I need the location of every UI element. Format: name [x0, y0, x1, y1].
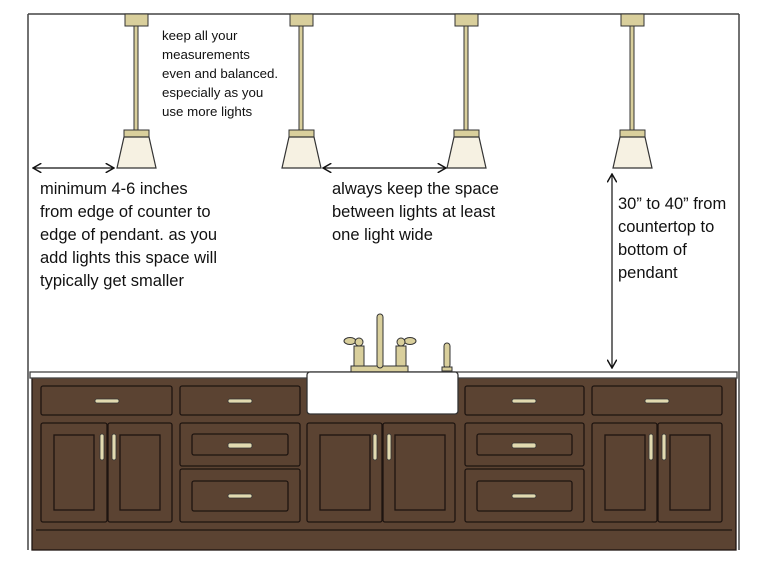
text: height: countertop to: [618, 218, 714, 236]
arrow: between lights: [323, 167, 446, 169]
text: spacing between lights: between lights at least: [332, 203, 495, 221]
text: spacing between lights: one light wide: [332, 226, 433, 244]
text: balanced measurements: measurements: [162, 47, 250, 62]
text: height: 30” to 40” from: [618, 195, 726, 213]
text: edge spacing: minimum 4-6 inches: [40, 180, 188, 198]
text: balanced measurements: use more lights: [162, 104, 252, 119]
text: edge spacing: [40, 180, 217, 290]
cabinets: [30, 372, 737, 550]
text: balanced measurements: even and balanced.: [162, 66, 278, 81]
text: height: pendant: [618, 264, 678, 282]
text: edge spacing: add lights this space will: [40, 249, 217, 267]
text: spacing between lights: always keep the space: [332, 180, 499, 198]
arrow: edge spacing: [33, 167, 114, 169]
pendant lights: [117, 14, 652, 168]
text: height: bottom of: [618, 241, 687, 259]
arrow: height: [611, 174, 613, 368]
text: edge spacing: edge of pendant. as you: [40, 226, 217, 244]
text: edge spacing: from edge of counter to: [40, 203, 211, 221]
text: balanced measurements: especially as you: [162, 85, 263, 100]
text: balanced measurements: [162, 28, 278, 119]
text: spacing between lights: [332, 180, 499, 244]
text: balanced measurements: keep all your: [162, 28, 237, 43]
text: edge spacing: typically get smaller: [40, 272, 184, 290]
text: height: [618, 195, 726, 282]
faucet: [344, 314, 452, 372]
